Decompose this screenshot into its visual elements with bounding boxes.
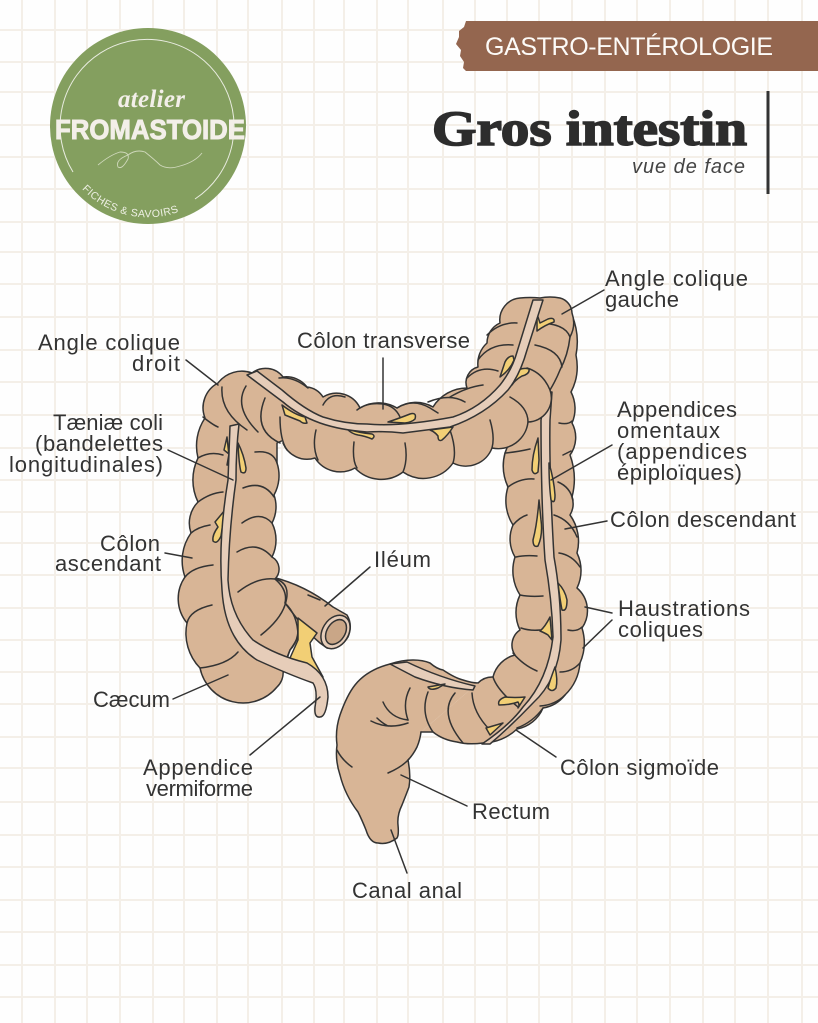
ileum <box>272 577 356 654</box>
label: côlon ascendant <box>55 531 161 576</box>
label: côlon transverse: Côlon transverse <box>297 328 470 353</box>
label: canal anal: Canal anal <box>352 878 462 903</box>
label: côlon descendant: Côlon descendant <box>610 507 796 532</box>
category banner: GASTRO-ENTÉROLOGIE <box>485 32 773 61</box>
label: haustrations coliques <box>618 596 750 642</box>
label: appendices omentaux: Appendices <box>617 397 737 422</box>
title rule <box>766 91 770 194</box>
label: appendice vermiforme: Appendice <box>143 755 253 780</box>
label: angle colique gauche: gauche <box>605 287 679 312</box>
label: taeniae coli: Tæniæ coli <box>53 410 163 435</box>
logo word: Fromastoide: FROMASTOIDE <box>55 114 245 145</box>
sigmoid and descending colon <box>405 315 587 744</box>
omental appendices, yellow fat tags <box>213 314 567 735</box>
subtitle: vue de face <box>632 156 745 178</box>
haustra folds <box>405 421 582 743</box>
label: taeniae coli: (bandelettes <box>35 431 163 456</box>
label: haustrations coliques: Haustrations <box>618 596 750 621</box>
label: haustrations coliques: coliques <box>618 617 703 642</box>
logo tagline: FICHES & SAVOIRS <box>82 184 178 218</box>
logo: atelier Fromastoide badge <box>50 28 246 224</box>
ascending colon and caecum <box>178 371 298 703</box>
label: angle colique droit: droit <box>132 351 180 376</box>
large intestine illustration <box>178 297 587 843</box>
transverse colon <box>252 297 574 479</box>
leader lines <box>165 290 612 873</box>
taenia of rectosigmoid <box>390 662 475 690</box>
label: appendices omentaux: omentaux <box>617 418 720 443</box>
label: taeniae coli: longitudinales) <box>9 452 163 477</box>
transverse haustra folds <box>261 323 570 472</box>
label: rectum: Rectum <box>472 799 550 824</box>
label: taeniae coli <box>9 410 163 477</box>
title: Gros intestin <box>432 100 747 156</box>
taenia of descending colon <box>482 392 561 744</box>
label: côlon sigmoïde: Côlon sigmoïde <box>560 755 719 780</box>
label: iléum: Iléum <box>374 547 431 572</box>
taenia of transverse colon <box>247 300 543 433</box>
label: appendices omentaux: (appendices <box>617 439 747 464</box>
label: appendices omentaux <box>617 397 747 485</box>
label: appendice vermiforme <box>143 755 253 801</box>
label: angle colique gauche <box>605 266 748 312</box>
rectum <box>336 660 478 843</box>
category banner <box>456 21 818 71</box>
taenia of ascending colon and vermiform appendix <box>221 424 328 717</box>
label: angle colique droit <box>38 330 180 376</box>
label: appendices omentaux: épiploïques) <box>617 460 742 485</box>
label: côlon ascendant: Côlon <box>100 531 160 556</box>
label: appendice vermiforme: vermiforme <box>146 776 253 801</box>
label: angle colique droit: Angle colique <box>38 330 180 355</box>
anatomical labels <box>9 266 796 903</box>
logo word: atelier: atelier <box>118 86 185 113</box>
label: côlon ascendant: ascendant <box>55 551 161 576</box>
label: caecum: Cæcum <box>93 687 170 712</box>
label: angle colique gauche: Angle colique <box>605 266 748 291</box>
